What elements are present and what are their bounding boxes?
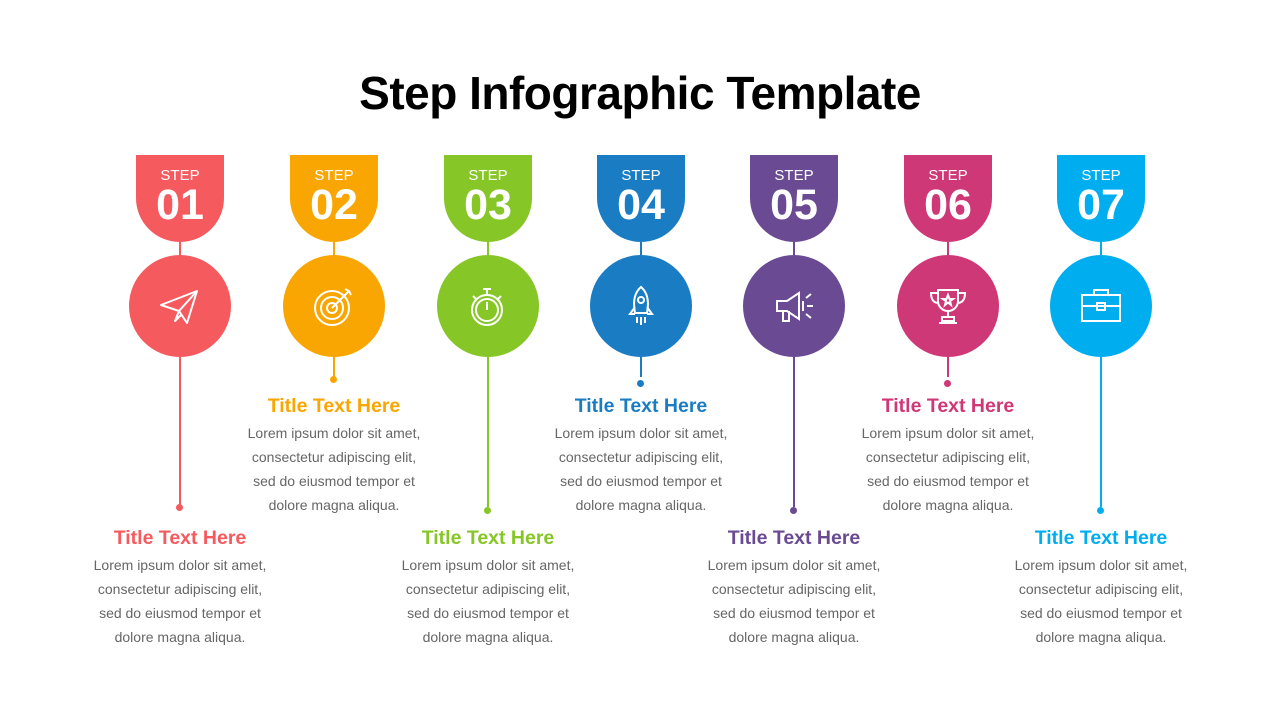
- text: step 05: consectetur adipiscing elit,: [712, 581, 876, 597]
- tab: step 06: STEP: [928, 167, 968, 184]
- step 07: [1015, 155, 1187, 645]
- text: step 03: sed do eiusmod tempor et: [407, 605, 569, 621]
- tab: step 04: [597, 155, 685, 242]
- text: step 05: sed do eiusmod tempor et: [713, 605, 875, 621]
- icon: paper plane: [129, 255, 231, 357]
- text: step 01: [94, 527, 266, 645]
- text: step 04: dolore magna aliqua.: [576, 497, 706, 513]
- text: step 05: dolore magna aliqua.: [729, 629, 859, 645]
- text: step 04: Title Text Here: [575, 395, 707, 417]
- step 04: [555, 155, 727, 513]
- icon: target: [283, 255, 385, 357]
- text: step 01: sed do eiusmod tempor et: [99, 605, 261, 621]
- text: step 01: consectetur adipiscing elit,: [98, 581, 262, 597]
- tab: step 02: [290, 155, 378, 242]
- text: step 01: Lorem ipsum dolor sit amet,: [94, 557, 266, 573]
- tab: step 02: 02: [310, 181, 358, 229]
- icon: briefcase: [1050, 255, 1152, 357]
- tab: step 05: [750, 155, 838, 242]
- tab: step 01: 01: [156, 181, 204, 229]
- tab: step 03: [444, 155, 532, 242]
- tab: step 03: STEP: [468, 167, 508, 184]
- text: step 06: Title Text Here: [882, 395, 1014, 417]
- icon: rocket: [590, 255, 692, 357]
- text: step 07: sed do eiusmod tempor et: [1020, 605, 1182, 621]
- step 06: [862, 155, 1034, 513]
- tab: step 05: STEP: [774, 167, 814, 184]
- icon: stopwatch: [437, 255, 539, 357]
- text: step 06: Lorem ipsum dolor sit amet,: [862, 425, 1034, 441]
- text: step 07: dolore magna aliqua.: [1036, 629, 1166, 645]
- title: Step Infographic Template: [359, 67, 921, 119]
- text: step 03: Lorem ipsum dolor sit amet,: [402, 557, 574, 573]
- step 02: [248, 155, 420, 513]
- text: step 03: [402, 527, 574, 645]
- text: step 02: Title Text Here: [268, 395, 400, 417]
- text: step 04: consectetur adipiscing elit,: [559, 449, 723, 465]
- text: step 04: sed do eiusmod tempor et: [560, 473, 722, 489]
- text: step 02: [248, 395, 420, 513]
- text: step 05: Lorem ipsum dolor sit amet,: [708, 557, 880, 573]
- text: step 07: consectetur adipiscing elit,: [1019, 581, 1183, 597]
- text: step 06: [862, 395, 1034, 513]
- text: step 02: consectetur adipiscing elit,: [252, 449, 416, 465]
- tab: step 07: 07: [1077, 181, 1125, 229]
- step 03: [402, 155, 574, 645]
- text: step 07: [1015, 527, 1187, 645]
- icon: megaphone: [743, 255, 845, 357]
- step 05: [708, 155, 880, 645]
- tab: step 02: STEP: [314, 167, 354, 184]
- tab: step 06: 06: [924, 181, 972, 229]
- tab: step 06: [904, 155, 992, 242]
- text: step 07: Lorem ipsum dolor sit amet,: [1015, 557, 1187, 573]
- text: step 07: Title Text Here: [1035, 527, 1167, 549]
- step 01: [94, 155, 266, 645]
- text: step 03: consectetur adipiscing elit,: [406, 581, 570, 597]
- tab: step 04: 04: [617, 181, 665, 229]
- text: step 05: [708, 527, 880, 645]
- tab: step 01: STEP: [160, 167, 200, 184]
- text: step 04: [555, 395, 727, 513]
- tab: step 01: [136, 155, 224, 242]
- text: step 04: Lorem ipsum dolor sit amet,: [555, 425, 727, 441]
- text: step 01: Title Text Here: [114, 527, 246, 549]
- text: step 02: Lorem ipsum dolor sit amet,: [248, 425, 420, 441]
- text: step 06: dolore magna aliqua.: [883, 497, 1013, 513]
- text: step 05: Title Text Here: [728, 527, 860, 549]
- text: step 06: consectetur adipiscing elit,: [866, 449, 1030, 465]
- text: step 03: dolore magna aliqua.: [423, 629, 553, 645]
- tab: step 07: [1057, 155, 1145, 242]
- text: step 02: sed do eiusmod tempor et: [253, 473, 415, 489]
- tab: step 03: 03: [464, 181, 512, 229]
- icon: trophy: [897, 255, 999, 357]
- tab: step 07: STEP: [1081, 167, 1121, 184]
- tab: step 04: STEP: [621, 167, 661, 184]
- text: step 01: dolore magna aliqua.: [115, 629, 245, 645]
- text: step 06: sed do eiusmod tempor et: [867, 473, 1029, 489]
- text: step 03: Title Text Here: [422, 527, 554, 549]
- tab: step 05: 05: [770, 181, 818, 229]
- text: step 02: dolore magna aliqua.: [269, 497, 399, 513]
